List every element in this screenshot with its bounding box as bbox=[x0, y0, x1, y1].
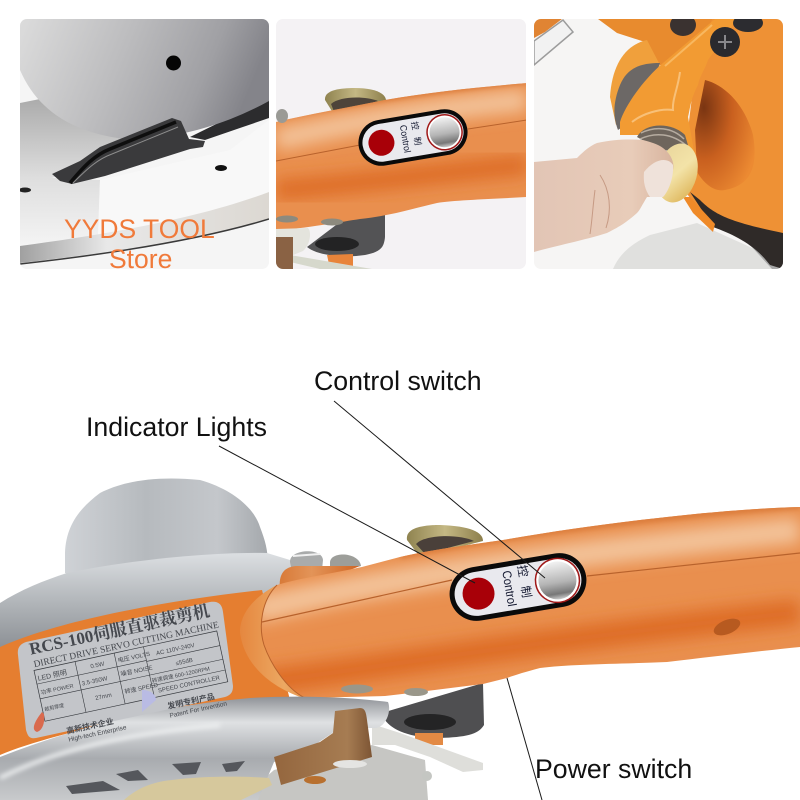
label plate: 电压 VOLTS bbox=[117, 650, 151, 664]
label plate: 27mm bbox=[95, 693, 112, 702]
label plate bbox=[18, 600, 237, 748]
watermark bbox=[64, 214, 215, 274]
label plate: SPEED CONTROLLER bbox=[158, 675, 221, 695]
presser foot bbox=[52, 118, 205, 184]
leader line: power switch bbox=[507, 678, 542, 800]
label plate: 功率 POWER bbox=[40, 682, 74, 696]
label plate: 0.5W bbox=[90, 661, 105, 670]
blade disc bbox=[20, 19, 269, 139]
arm bbox=[255, 505, 800, 698]
machine body bbox=[684, 19, 783, 234]
knob bbox=[324, 88, 386, 110]
silver ring bbox=[0, 697, 389, 800]
leader line: control switch bbox=[334, 401, 545, 578]
panel: finger pressing button bbox=[534, 14, 783, 269]
flange bbox=[683, 197, 715, 232]
cavity bbox=[695, 80, 755, 190]
yoke bbox=[620, 19, 737, 157]
label plate: 噪音 NOISE bbox=[120, 663, 153, 678]
label: indicator lights: Indicator Lights bbox=[86, 412, 267, 442]
screws bbox=[670, 19, 763, 57]
label: power switch: Power switch bbox=[535, 754, 692, 784]
vent slots bbox=[66, 761, 245, 794]
dome bbox=[65, 479, 268, 585]
label plate: ≤55dB bbox=[175, 658, 193, 667]
control pill: 控制 bbox=[515, 564, 535, 608]
lower blade bbox=[613, 223, 783, 269]
label plate: High-tech Enterprise bbox=[68, 724, 128, 744]
plate shading bbox=[20, 99, 121, 224]
control pill: 控制 bbox=[409, 121, 424, 153]
threaded stud bbox=[637, 125, 690, 152]
bobbin knob bbox=[407, 525, 483, 557]
label plate: DIRECT DRIVE SERVO CUTTING MACHINE bbox=[33, 620, 220, 670]
plate rim bbox=[20, 192, 269, 263]
label plate: 高新技术企业 bbox=[65, 716, 114, 736]
dark wedge bbox=[190, 98, 269, 140]
label plate: RCS-100伺服直驱裁剪机 bbox=[27, 601, 211, 659]
bracket and screws bbox=[276, 109, 372, 269]
panel: control switch close-up bbox=[276, 19, 527, 269]
watermark: Store bbox=[109, 244, 172, 274]
control pill bbox=[445, 549, 591, 625]
lower bracket bbox=[240, 724, 483, 800]
beige cone bbox=[124, 777, 272, 800]
product: cutting machine bbox=[0, 479, 800, 800]
control pill bbox=[358, 109, 468, 166]
label plate: 3.5-350W bbox=[81, 676, 108, 688]
foam grip bbox=[307, 213, 385, 256]
shaft boss bbox=[280, 566, 360, 590]
brass button bbox=[662, 144, 698, 202]
foam wheel bbox=[610, 40, 660, 130]
dark base edge bbox=[690, 192, 783, 269]
label plate: LED 照明 bbox=[37, 669, 68, 683]
control pill: Control bbox=[499, 570, 519, 607]
disc hole bbox=[166, 56, 181, 70]
arm bbox=[276, 80, 527, 231]
flame logo bbox=[34, 712, 44, 732]
arm collar bbox=[240, 585, 320, 698]
control pill: Control bbox=[397, 124, 412, 154]
bolts bbox=[290, 551, 361, 572]
label plate: AC 110V-240V bbox=[156, 643, 195, 657]
patent logo bbox=[142, 690, 156, 712]
label: control switch: Control switch bbox=[314, 366, 482, 396]
label plate: Patent For Invention bbox=[169, 700, 228, 720]
watermark: YYDS TOOL bbox=[64, 214, 215, 244]
finger bbox=[534, 139, 673, 252]
bracket corner bbox=[534, 19, 573, 65]
leader line: indicator lights bbox=[219, 446, 475, 583]
motor shoulder bbox=[0, 553, 290, 650]
label plate: 发明专利产品 bbox=[166, 691, 216, 711]
orange housing band bbox=[0, 590, 290, 755]
foam grip bbox=[385, 683, 484, 738]
label plate: 转速 SPEED bbox=[124, 681, 159, 696]
top band bbox=[598, 19, 712, 66]
arm nuts bbox=[341, 684, 373, 694]
brown latch bbox=[274, 708, 372, 785]
panel: blade close-up bbox=[19, 19, 269, 269]
label plate: 裁剪厚度 bbox=[44, 702, 65, 713]
arm hole bbox=[711, 615, 743, 639]
label plate: 转速调速 600-1200RPM bbox=[151, 664, 211, 685]
